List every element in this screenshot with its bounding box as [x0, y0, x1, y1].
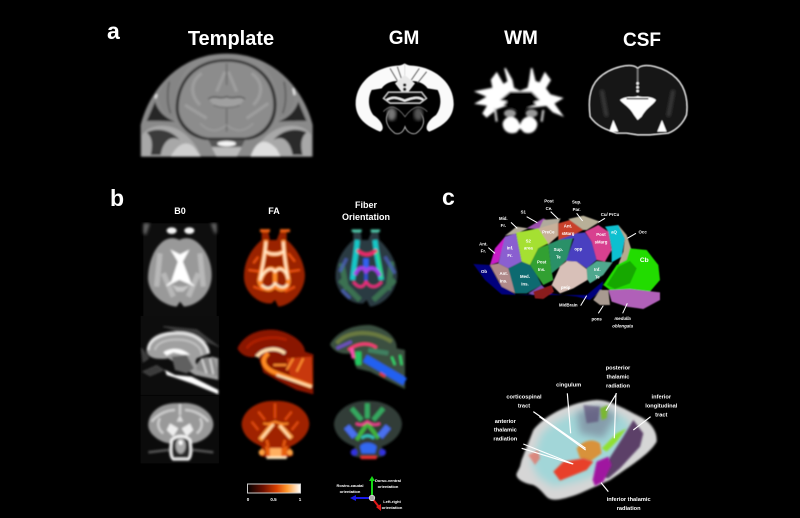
parcel labels: Ant. — [499, 271, 508, 276]
GM map — [356, 63, 454, 134]
parcel labels: pHip — [561, 285, 571, 290]
fiber orientation axial image — [336, 231, 397, 307]
parcel labels: oblongata — [612, 323, 634, 328]
parcel labels: Fr. — [501, 223, 506, 228]
parcel labels: opp — [574, 246, 583, 251]
tract labels: radiation — [617, 506, 641, 512]
orientation axes legend: orientation — [382, 505, 403, 510]
parcel leader arrows — [488, 212, 636, 313]
WM map — [477, 68, 562, 133]
orientation axes legend: Rostro-caudal — [337, 483, 363, 488]
orientation axes legend — [337, 476, 403, 511]
template brain image — [141, 54, 313, 157]
parcel labels: Te — [556, 254, 561, 259]
panel c: brain parcellation and tracts — [442, 184, 678, 512]
tract labels: anterior — [495, 419, 517, 425]
tract leader arrows — [522, 393, 651, 492]
parcel labels: Med. — [520, 274, 530, 279]
parcel labels: Ins. — [500, 278, 507, 283]
parcel labels: Post — [596, 232, 606, 237]
panel letter a: a — [107, 18, 120, 44]
parcel labels: Ce. — [546, 206, 552, 211]
parcel labels: pons — [591, 317, 602, 322]
fiber tract brain — [493, 366, 678, 512]
parcel labels — [479, 199, 649, 328]
corticospinal tract — [577, 441, 602, 462]
parcel labels: Ins. — [521, 281, 529, 286]
B0 sagittal image — [141, 316, 219, 395]
FA colour scale bar: 1 — [299, 497, 302, 502]
FA sagittal image — [237, 330, 313, 394]
inferior longitudinal tract — [583, 405, 643, 478]
column heading: Fiber Orientation: Orientation — [342, 212, 390, 222]
heading: CSF: CSF — [623, 30, 661, 51]
tract labels: cingulum — [556, 383, 581, 389]
parcel labels: Inf. — [594, 267, 601, 272]
parcel labels: aQ — [611, 230, 617, 235]
parcel labels: Occ — [639, 229, 647, 234]
orientation axes legend: Left-right — [383, 499, 401, 504]
B0 coronal image — [141, 396, 219, 463]
tract labels: tract — [655, 412, 668, 418]
panel a: tissue templates — [107, 18, 687, 157]
heading: GM: GM — [389, 28, 419, 49]
parcel labels: Mid. — [499, 216, 508, 221]
FA coronal image — [242, 401, 309, 458]
orientation axes legend: orientation — [340, 489, 361, 494]
heading: WM: WM — [504, 28, 538, 49]
parcel labels: Sup. — [572, 200, 581, 205]
tract labels: thalamic — [494, 428, 517, 434]
parcel labels: Ins. — [538, 267, 545, 272]
tract labels: inferior thalamic — [607, 497, 651, 503]
parcel labels: Cb — [640, 257, 649, 264]
parcel labels: Sup. — [554, 247, 563, 252]
anterior thalamic radiation — [528, 450, 593, 481]
tract labels — [493, 366, 678, 512]
panel letter b: b — [110, 185, 124, 211]
parcel labels: Fr. — [507, 253, 513, 258]
column heading: B0: B0 — [174, 206, 186, 216]
FA colour scale bar — [247, 484, 302, 502]
parcel labels: sMarg — [595, 239, 608, 244]
column heading: Fiber Orientation: Fiber — [355, 200, 377, 210]
parcel labels: Ob — [481, 269, 487, 274]
parcel labels: sMarg — [562, 231, 575, 236]
CSF map — [589, 65, 687, 135]
parcel labels: Post — [537, 260, 547, 265]
tract labels: radiation — [606, 383, 630, 389]
posterior thalamic radiation — [600, 405, 627, 452]
tract labels: longitudinal — [645, 404, 678, 410]
parcel labels: S1 — [521, 210, 527, 215]
tract labels: thalamic — [607, 374, 629, 380]
fiber orientation coronal image — [334, 401, 402, 458]
FA colour scale bar: 0 — [247, 497, 250, 502]
orientation axes legend: Dorso-ventral — [375, 478, 401, 483]
tract labels: radiation — [493, 436, 518, 442]
orientation axes legend: orientation — [378, 484, 399, 489]
parcel labels: S2 — [526, 238, 532, 243]
parcel labels: Ant. — [564, 224, 572, 229]
tract labels: posterior — [606, 366, 631, 372]
FA colour scale bar: 0.5 — [270, 497, 277, 502]
panel b: diffusion maps — [110, 185, 405, 511]
parcel labels: Cu/ PrCu — [601, 212, 620, 217]
tract labels: inferior — [652, 395, 672, 401]
parcel labels: Inf. — [507, 246, 513, 251]
parcel labels: Fr. — [481, 249, 486, 254]
column heading: FA: FA — [268, 206, 280, 216]
parcel labels: Te — [595, 274, 600, 279]
fiber orientation sagittal image — [330, 325, 405, 389]
parcel labels: Ant. — [479, 241, 488, 246]
translucent brain surface — [516, 400, 657, 500]
tract labels: tract — [518, 403, 530, 409]
FA axial image — [244, 231, 305, 307]
heading: Template: Template — [188, 28, 274, 50]
parcel labels: MidBrain — [559, 303, 578, 308]
parcel labels: Par. — [573, 207, 581, 212]
parcel labels: medulla — [614, 316, 631, 321]
parcellated brain — [473, 199, 660, 328]
parcel labels: area — [524, 246, 533, 251]
parcel labels: Post — [544, 199, 554, 204]
B0 axial image — [143, 223, 217, 318]
tract labels: corticospinal — [506, 395, 542, 401]
panel letter c: c — [442, 184, 455, 210]
inferior thalamic radiation — [593, 457, 612, 486]
parcel labels: PreCe — [542, 230, 555, 235]
